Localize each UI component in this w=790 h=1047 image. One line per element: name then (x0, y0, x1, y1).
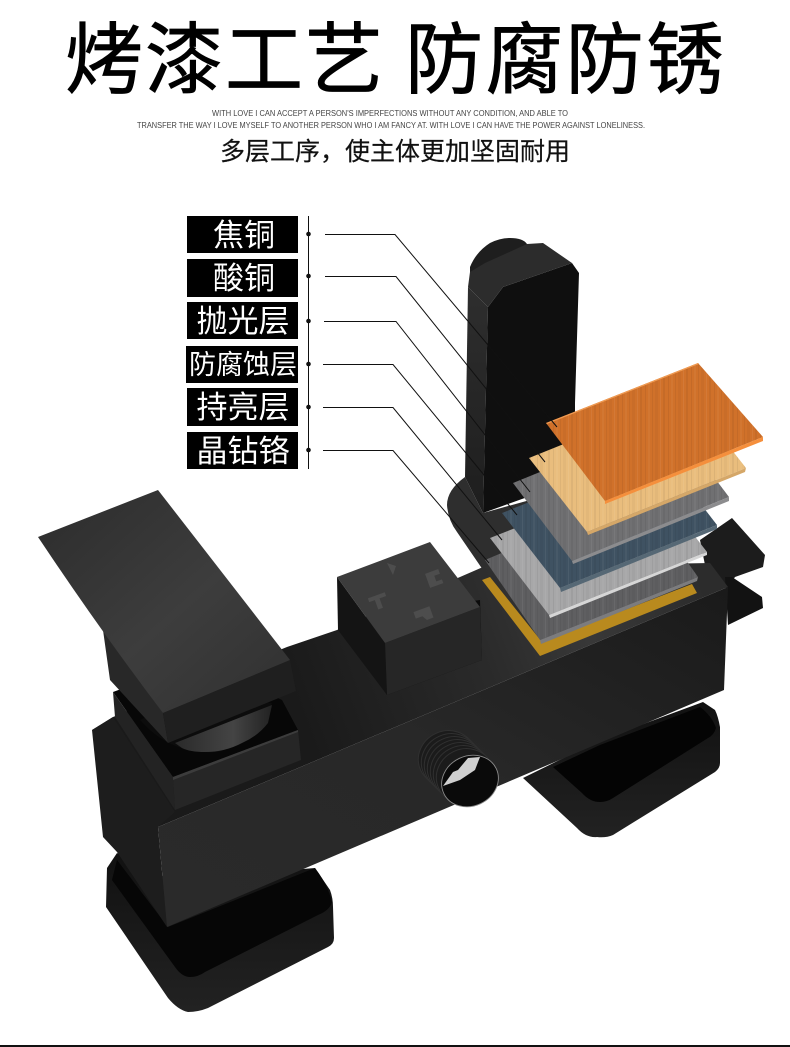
handle socket (113, 660, 301, 810)
left foot (106, 853, 334, 1012)
title: 烤漆工艺 (65, 16, 383, 104)
label: 酸铜 (187, 259, 298, 297)
english tagline: WITH LOVE I CAN ACCEPT A PERSON'S IMPERFECTIONS WITHOUT ANY CONDITION, AND ABLE TO (212, 109, 568, 118)
back handle (447, 238, 579, 570)
label: 焦铜 (187, 216, 298, 253)
layer: tan acid copper (529, 394, 746, 535)
label: 持亮层: 持亮层 (196, 390, 290, 425)
layer: dark grey chrome (485, 495, 698, 644)
threaded outlet (409, 721, 507, 816)
layer labels (186, 216, 298, 469)
english tagline: TRANSFER THE WAY I LOVE MYSELF TO ANOTHER PERSON WHO I AM FANCY AT. WITH LOVE I CAN HAVE THE POWER AGAINST LONELINESS. (137, 121, 645, 130)
knob engraved symbols (368, 563, 443, 623)
label: 晶钻铬: 晶钻铬 (196, 434, 290, 469)
title: 防腐防锈 (405, 16, 724, 104)
layer: slate blue (502, 450, 717, 592)
layer: gold base (482, 577, 697, 656)
label: 焦铜: 焦铜 (213, 218, 275, 253)
layer: grey (513, 419, 729, 564)
subtitle: 多层工序，使主体更加坚固耐用 (220, 138, 570, 166)
leader lines (323, 234, 557, 563)
layer: silver (490, 476, 707, 618)
diverter knob (337, 542, 482, 695)
title (65, 16, 724, 104)
label axis with dots (306, 216, 311, 469)
layer: orange copper (546, 363, 763, 504)
label: 防腐蚀层: 防腐蚀层 (189, 350, 297, 380)
label: 酸铜: 酸铜 (213, 261, 275, 296)
body front face (158, 587, 728, 927)
rear tab lower (725, 577, 763, 625)
lever handle (38, 490, 296, 743)
body top face (92, 563, 728, 827)
rear tab upper (700, 518, 765, 587)
faucet product illustration (38, 238, 765, 1012)
right foot (523, 702, 720, 837)
bottom rule (0, 1045, 790, 1047)
english tagline (137, 109, 645, 130)
body left face (92, 717, 175, 927)
label: 抛光层: 抛光层 (196, 304, 290, 339)
